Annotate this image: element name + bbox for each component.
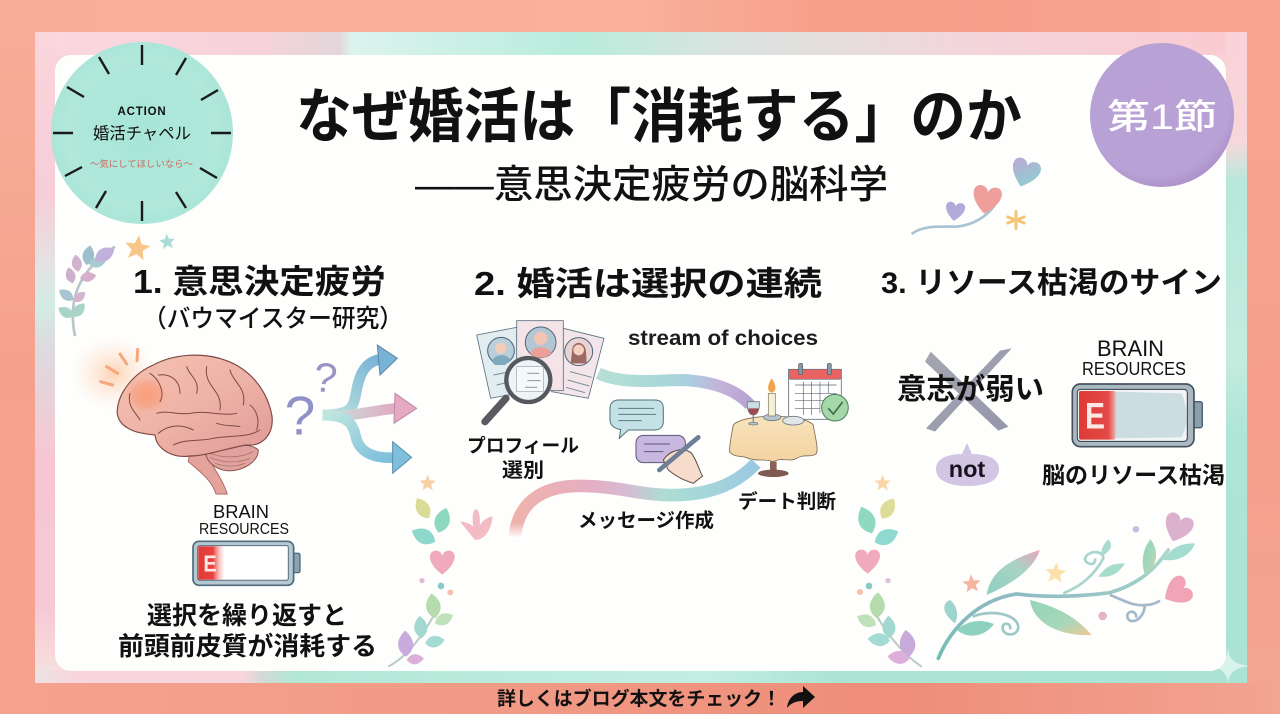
white main panel xyxy=(55,55,1226,671)
logo badge xyxy=(51,42,233,224)
icon: drained battery right: E xyxy=(1085,395,1105,436)
section badge xyxy=(1090,43,1234,187)
caption left: 選択を繰り返すと xyxy=(147,602,347,630)
label: profile selection: 選別 xyxy=(502,459,544,482)
footer call to action: 詳しくはブログ本文をチェック！ xyxy=(497,687,781,710)
icon: drained battery right xyxy=(1072,384,1202,447)
icon: question marks and branching arrows xyxy=(285,345,417,473)
subtitle: ——意思決定疲労の脳科学 xyxy=(415,164,888,207)
icon: question marks and branching arrows: ? xyxy=(310,353,340,402)
brain resources label right: RESOURCES xyxy=(1082,359,1186,379)
heading 1: 1. 意思決定疲労 xyxy=(133,263,386,300)
icon: profile cards and magnifier xyxy=(477,321,750,422)
icon: dinner table and calendar xyxy=(507,363,848,538)
stream ribbon top xyxy=(598,373,750,405)
decoration: center left floral xyxy=(388,475,493,667)
label: profile selection: プロフィール xyxy=(467,435,579,457)
logo badge: 〜気にしてほしいなら〜 xyxy=(90,158,193,169)
brain resources label left: RESOURCES xyxy=(199,521,289,538)
label: date decision: デート判断 xyxy=(738,490,836,513)
label: profile selection xyxy=(467,435,579,482)
stream ribbon bottom xyxy=(515,463,756,537)
label: stream of choices: stream of choices xyxy=(628,327,818,350)
decoration: hearts top right xyxy=(912,156,1043,234)
brain resources label left xyxy=(199,502,289,538)
title: なぜ婚活は「消耗する」のか xyxy=(296,84,1022,150)
label: message writing: メッセージ作成 xyxy=(578,509,714,532)
decoration: laurel and stars xyxy=(56,233,176,336)
logo badge: ACTION xyxy=(118,106,166,118)
logo badge: 婚活チャペル xyxy=(93,124,191,143)
heading 3: 3. リソース枯渇のサイン xyxy=(881,267,1222,300)
callout: not: not xyxy=(949,456,985,482)
brain resources label right: BRAIN xyxy=(1097,336,1164,361)
icon: low battery left xyxy=(193,541,300,585)
crossed-out text: weak will xyxy=(897,348,1044,432)
icon: question marks and branching arrows: ? xyxy=(285,384,315,446)
crossed-out text: weak will: 意志が弱い xyxy=(897,372,1044,406)
caption left: 前頭前皮質が消耗する xyxy=(118,632,377,661)
callout: not xyxy=(936,443,999,486)
heading 1 xyxy=(133,263,403,333)
section badge: 第1節 xyxy=(1107,98,1217,137)
icon: low battery left: E xyxy=(203,551,217,577)
icon: brain xyxy=(70,337,272,494)
icon: speech bubbles and writing hand xyxy=(610,400,703,483)
decoration: lower right vine xyxy=(854,475,1196,667)
brain resources label left: BRAIN xyxy=(213,502,269,522)
heading 1: （バウマイスター研究） xyxy=(143,305,403,333)
heading 2: 2. 婚活は選択の連続 xyxy=(474,265,822,302)
brain resources label right xyxy=(1082,336,1186,379)
label: brain resource depletion: 脳のリソース枯渇 xyxy=(1042,462,1225,488)
caption left xyxy=(118,602,377,661)
